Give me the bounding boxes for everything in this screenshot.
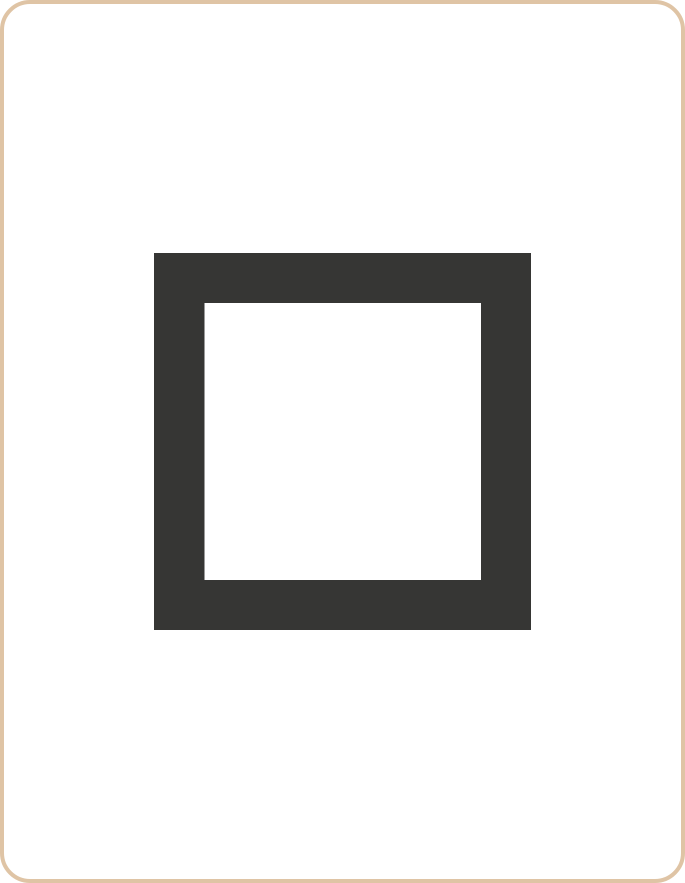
icon: dark square outline <box>154 253 531 630</box>
